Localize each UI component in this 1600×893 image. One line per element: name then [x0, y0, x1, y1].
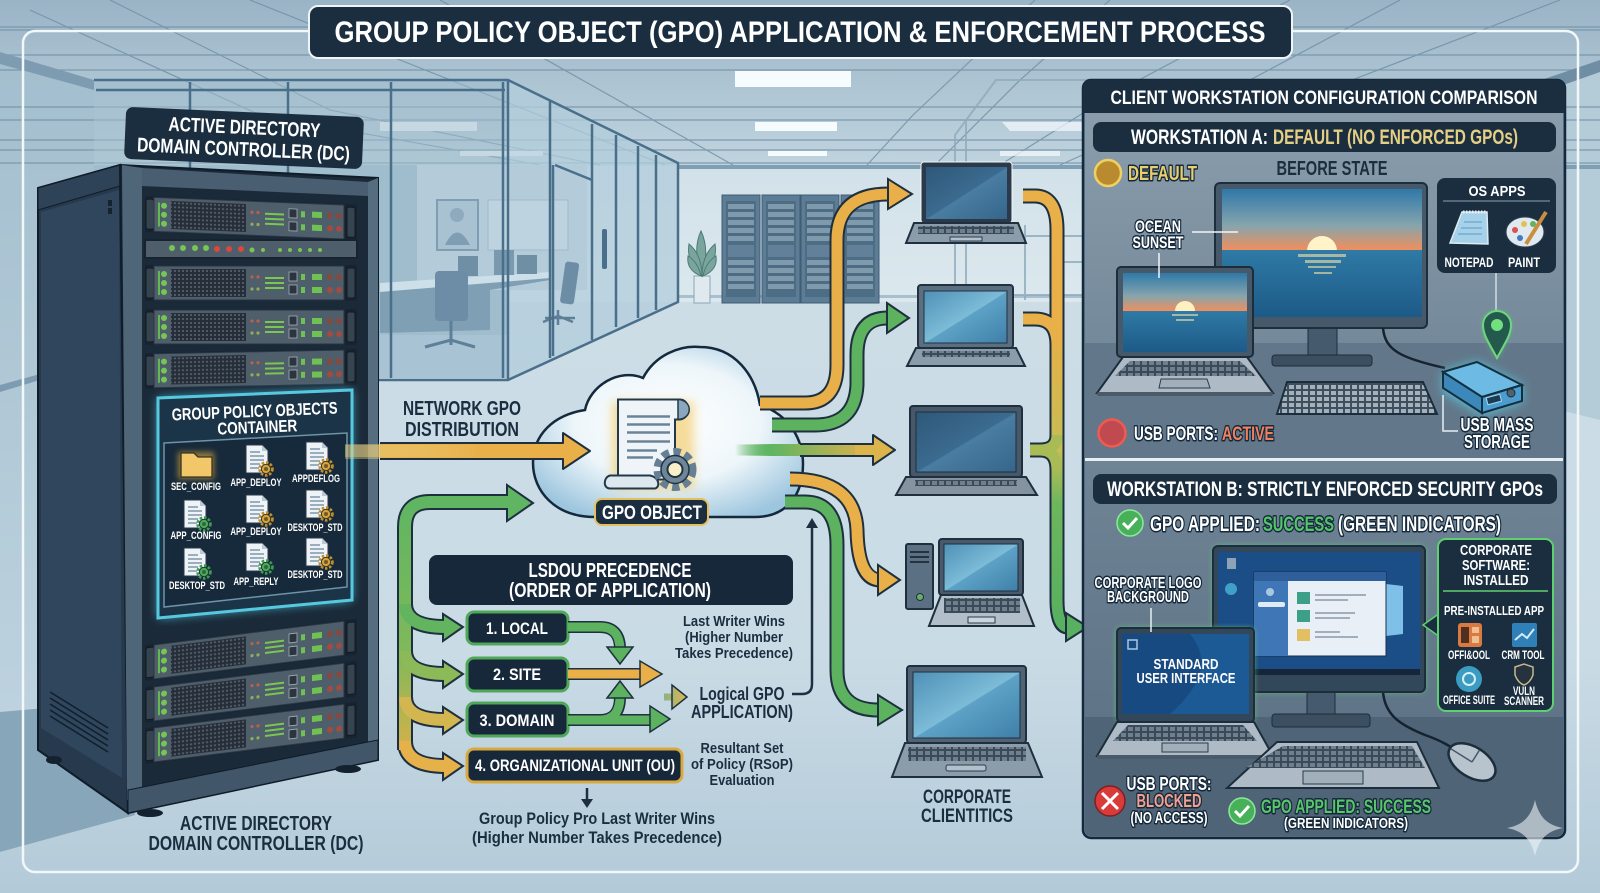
ocean sunset label: OCEAN [1135, 217, 1181, 236]
policy file labels: APP_DEPLOY [230, 526, 282, 538]
icon: paint palette [1506, 212, 1546, 247]
gpo applied success banner: SUCCESS [1263, 513, 1334, 536]
monitor b with corporate desktop [1213, 546, 1458, 752]
os apps box: PAINT [1508, 255, 1541, 270]
label: corporate clientitics: CORPORATE [923, 787, 1011, 808]
usb mass storage label: STORAGE [1464, 432, 1530, 452]
os apps box: NOTEPAD [1444, 255, 1494, 270]
group policy objects container [158, 390, 352, 618]
icon: usb mass storage [1443, 362, 1522, 415]
icon: policy scroll with gear [605, 400, 694, 490]
note: last writer wins: (Higher Number [685, 629, 783, 646]
laptop b with standard user interface [1097, 628, 1273, 759]
label: corporate clientitics [921, 787, 1013, 827]
policy file labels: APPDEFLOG [292, 473, 340, 485]
policy file labels [169, 473, 343, 592]
policy file labels: DESKTOP_STD [169, 580, 225, 592]
usb ports blocked indicator: (NO ACCESS) [1130, 810, 1208, 827]
client laptop 3 [896, 406, 1037, 495]
icon: folder sec_config [178, 452, 214, 479]
note: last writer wins: Takes Precedence) [675, 645, 793, 662]
corporate software box [1423, 539, 1553, 711]
label: network gpo distribution: DISTRIBUTION [405, 419, 519, 441]
second laptop keyboard [1227, 742, 1439, 788]
monitor a with ocean sunset [1215, 183, 1445, 368]
note: logical gpo application: APPLICATION) [691, 702, 793, 722]
level 2 site: 2. SITE [493, 665, 541, 684]
workstation a heading [1093, 122, 1556, 152]
note: group policy last writer wins: (Higher Number Takes Precedence) [472, 828, 722, 847]
note: last writer wins [675, 613, 793, 662]
arrow: ou down to note [581, 788, 593, 808]
client desktop tower and laptop 4 [906, 539, 1034, 626]
usb ports blocked indicator: USB PORTS: [1126, 774, 1212, 794]
corporate software box: CRM TOOL [1502, 650, 1544, 662]
before state label: BEFORE STATE [1276, 158, 1388, 180]
gpo applied success footer: GPO APPLIED: SUCCESS [1261, 797, 1431, 818]
corporate software box: OFFICE SUITE [1443, 695, 1495, 707]
title banner: GROUP POLICY OBJECT (GPO) APPLICATION & ENFORCEMENT PROCESS [334, 16, 1266, 49]
lsdou precedence heading: (ORDER OF APPLICATION) [509, 580, 711, 602]
icon: vuln scanner [1515, 664, 1533, 685]
keyboard a [1277, 382, 1437, 414]
label: domain controller tag: ACTIVE DIRECTORY [168, 114, 321, 142]
note: resultant set of policy [691, 740, 793, 789]
os apps box [1437, 178, 1556, 273]
lsdou precedence heading [429, 555, 793, 605]
title banner [309, 6, 1292, 58]
corporate software box: SOFTWARE: [1462, 557, 1530, 574]
workstation b background [1085, 461, 1563, 836]
glass meeting room [94, 80, 678, 380]
upper server units [145, 196, 357, 389]
container heading [171, 399, 339, 440]
corporate logo background label: BACKGROUND [1107, 589, 1189, 606]
icon: office suite [1456, 666, 1482, 692]
corporate software box: SCANNER [1504, 696, 1544, 708]
level 3 domain: 3. DOMAIN [480, 711, 554, 730]
corporate software box: INSTALLED [1464, 572, 1529, 589]
default status indicator: DEFAULT [1128, 163, 1197, 185]
watermark sparkle [1507, 800, 1563, 856]
policy file labels: APP_CONFIG [170, 530, 222, 542]
gpo applied success banner [1117, 510, 1501, 536]
corporate software box: VULN [1513, 686, 1535, 698]
level 2 site [467, 658, 568, 691]
label: domain controller caption: DOMAIN CONTROLLER (DC) [148, 833, 364, 855]
arrow: application back to cloud [792, 518, 818, 694]
icon: crm tool [1512, 623, 1537, 647]
icon: office tool [1458, 623, 1482, 647]
cloud with gpo object [533, 347, 803, 525]
arrow: cloud to laptop 3 [735, 435, 895, 465]
icon: notepad [1450, 212, 1488, 244]
distant server racks and plant [688, 195, 879, 303]
left bus arrow feeding cloud and lsdou levels [405, 485, 533, 780]
policy file labels: SEC_CONFIG [171, 481, 221, 493]
level 3 domain [467, 703, 568, 736]
arrow: cloud to laptop 2 [772, 303, 909, 425]
laptop b with standard user interface: USER INTERFACE [1136, 670, 1236, 687]
icon: mouse [1442, 736, 1502, 788]
arrow: cloud to laptop 5 [785, 502, 902, 725]
workstation b heading [1093, 474, 1557, 504]
level 1 local [467, 612, 568, 644]
note: last writer wins: Last Writer Wins [683, 613, 785, 630]
label: network gpo distribution: NETWORK GPO [403, 398, 521, 420]
label: network gpo distribution [403, 398, 521, 441]
corporate software box: OFFI&OOL [1448, 650, 1490, 662]
label: domain controller caption: ACTIVE DIRECTORY [180, 813, 333, 835]
gpo applied success banner: (GREEN INDICATORS) [1338, 513, 1501, 536]
laptop a with ocean sunset [1097, 267, 1273, 396]
ocean sunset label [1132, 217, 1238, 278]
label: corporate clientitics: CLIENTITICS [921, 806, 1013, 827]
policy file labels: DESKTOP_STD [288, 522, 343, 534]
server rack: active directory domain controller [38, 165, 378, 817]
usb ports active indicator [1098, 420, 1274, 446]
os apps box: OS APPS [1468, 183, 1526, 200]
policy file labels: DESKTOP_STD [288, 569, 343, 581]
arrow: cloud to workstation 4 [790, 479, 900, 595]
note: group policy last writer wins: Group Policy Pro Last Writer Wins [479, 809, 715, 828]
icon: green location pin [1483, 311, 1511, 358]
lsdou precedence heading: LSDOU PRECEDENCE [528, 560, 692, 582]
gpo object label: GPO OBJECT [602, 503, 702, 524]
container heading: GROUP POLICY OBJECTS [171, 399, 338, 424]
panel: client workstation comparison [1083, 80, 1565, 838]
workstation a background [1085, 113, 1563, 458]
note: logical gpo application: Logical GPO [700, 684, 784, 704]
workstation a heading: WORKSTATION A: [1131, 126, 1268, 149]
gpo applied success banner: GPO APPLIED: [1150, 513, 1260, 536]
arrow: dc to cloud [345, 433, 590, 469]
right background furniture [955, 80, 1100, 300]
note: group policy last writer wins [472, 809, 722, 847]
level 1 local: 1. LOCAL [486, 619, 548, 638]
workstation a heading: DEFAULT (NO ENFORCED GPOs) [1273, 126, 1518, 149]
corporate software box: PRE-INSTALLED APP [1444, 603, 1544, 618]
gpo applied success footer [1229, 797, 1431, 832]
label: domain controller caption [148, 813, 364, 855]
client laptop 5 [892, 666, 1042, 777]
gpo object label [595, 499, 708, 525]
usb ports active indicator: USB PORTS: [1134, 424, 1218, 445]
policy file labels: APP_DEPLOY [230, 477, 282, 489]
usb mass storage label: USB MASS [1460, 415, 1534, 435]
note: resultant set of policy: of Policy (RSoP) [691, 756, 793, 773]
usb ports blocked indicator: BLOCKED [1136, 791, 1202, 811]
label: domain controller tag: DOMAIN CONTROLLER (DC) [137, 134, 350, 166]
container heading: CONTAINER [217, 416, 298, 439]
corporate logo background label [1094, 575, 1202, 632]
arrow: cloud to laptop 1 [760, 179, 912, 403]
laptop b with standard user interface: STANDARD [1154, 656, 1219, 673]
label: domain controller tag [124, 107, 364, 169]
gpo applied success footer: (GREEN INDICATORS) [1284, 815, 1408, 832]
arrows between lsdou levels [568, 627, 687, 732]
merged bracket arrow to workstation b [1023, 196, 1088, 641]
note: resultant set of policy: Resultant Set [700, 740, 784, 757]
ocean sunset label: SUNSET [1132, 233, 1184, 252]
policy file icons [184, 442, 332, 578]
usb mass storage label [1443, 395, 1534, 452]
client laptop 1 [906, 162, 1026, 243]
lower server units [145, 618, 357, 764]
level 4 organizational unit: 4. ORGANIZATIONAL UNIT (OU) [475, 756, 675, 775]
level 4 organizational unit [467, 749, 682, 782]
policy file labels: APP_REPLY [234, 576, 279, 588]
usb ports blocked indicator [1095, 774, 1212, 827]
usb ports active indicator: ACTIVE [1222, 424, 1274, 445]
corporate logo background label: CORPORATE LOGO [1094, 575, 1202, 592]
default status indicator [1095, 160, 1197, 186]
panel heading [1083, 80, 1565, 113]
client laptop 2 [907, 285, 1025, 366]
note: logical gpo application [691, 684, 793, 722]
corporate software box: CORPORATE [1460, 542, 1532, 559]
note: resultant set of policy: Evaluation [710, 772, 774, 789]
